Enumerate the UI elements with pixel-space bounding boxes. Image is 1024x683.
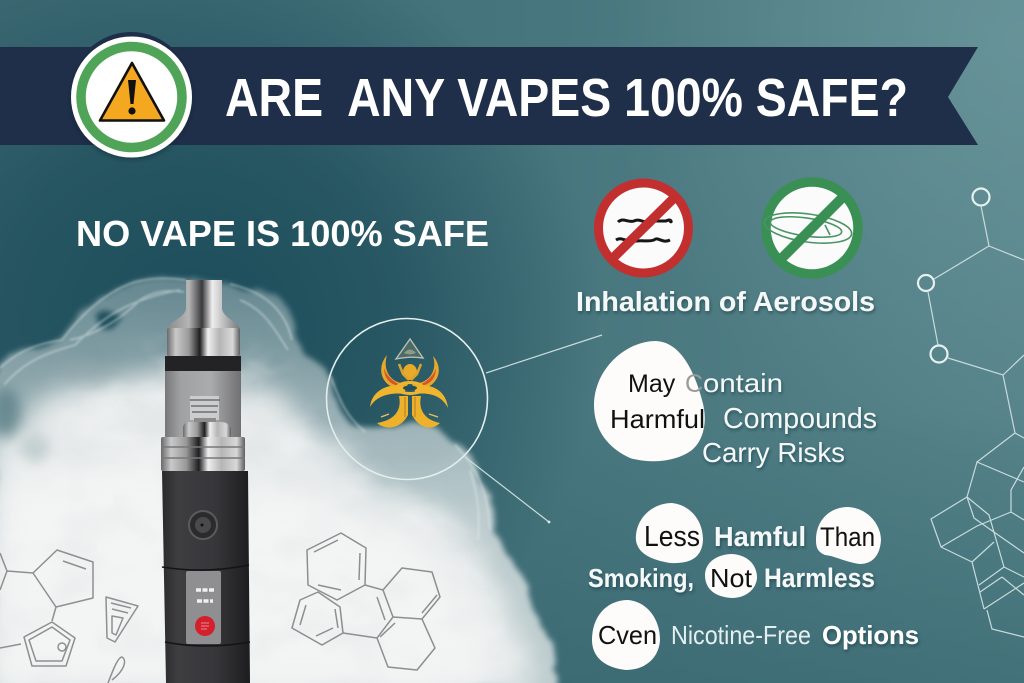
text block: less harmful than smoking: Hamful [714,521,806,552]
callout line: upper [486,335,602,373]
figure [403,364,417,380]
icon: warning triangle [100,63,164,120]
wispy outer layer [0,277,558,683]
callout: biohazard circle [326,318,602,523]
lower legs [377,396,408,428]
text block: less harmful than smoking: Harmless [764,563,875,593]
upper horns [381,355,408,391]
text block: even nicotine-free options: Options [822,620,919,650]
text block: may contain harmful compounds: C [685,370,703,398]
text block: even nicotine-free options [592,600,919,670]
grey shading texture [0,412,490,683]
text block: may contain harmful compounds: Carry Risks [702,437,845,468]
subheading: NO VAPE IS 100% SAFE [76,213,489,254]
text block: less harmful than smoking [588,503,881,598]
fire button [189,511,217,539]
side arcs [370,385,405,407]
wispy strands [0,278,490,540]
callout line: lower [465,457,549,522]
icon: biohazard [370,339,448,428]
near white core [0,458,495,683]
text block: may contain harmful compounds: Compounds [723,403,877,435]
text block: less harmful than smoking: Smoking, [588,563,694,593]
text block: may contain harmful compounds: Harmful [610,404,705,434]
text block: even nicotine-free options: Cven [598,620,657,650]
glass tank [165,371,241,437]
blob: less [636,503,703,563]
tank collar [167,328,240,356]
blob: than [816,507,881,564]
banner title: ARE ANY VAPES 100% SAFE? [225,68,908,128]
base ring [161,437,245,471]
vape device [161,280,250,683]
molecule: right side [918,188,1024,637]
text block: even nicotine-free options: Nicotine-Free [671,620,811,650]
battery body [162,471,250,683]
billow texture [0,340,540,683]
blob [594,341,705,461]
text block: may contain harmful compounds: May [628,370,676,398]
text block: less harmful than smoking: Not [710,563,753,593]
molecule: hexagon rings [292,533,440,670]
text block: may contain harmful compounds [594,341,877,468]
dense smoke [0,372,535,683]
molecule: lower left [0,550,138,683]
icon: no smoke wisps (red) [598,183,688,273]
mouthpiece [167,280,240,330]
text block: less harmful than smoking: Less [644,521,700,553]
icon: no aerosol ring (green) [762,182,858,274]
title banner [0,47,978,145]
smoke cloud [0,277,558,683]
banner ribbon [0,47,978,145]
heading: inhalation of aerosols: Inhalation of Aerosols [576,286,875,317]
control panel [186,571,221,644]
blob: cven [592,600,660,670]
smoke shadow patches [59,366,111,384]
blob: not [705,554,757,598]
warning badge [70,32,192,158]
text block: less harmful than smoking: Than [820,522,875,552]
text block: may contain harmful compounds: ontain [703,368,783,398]
